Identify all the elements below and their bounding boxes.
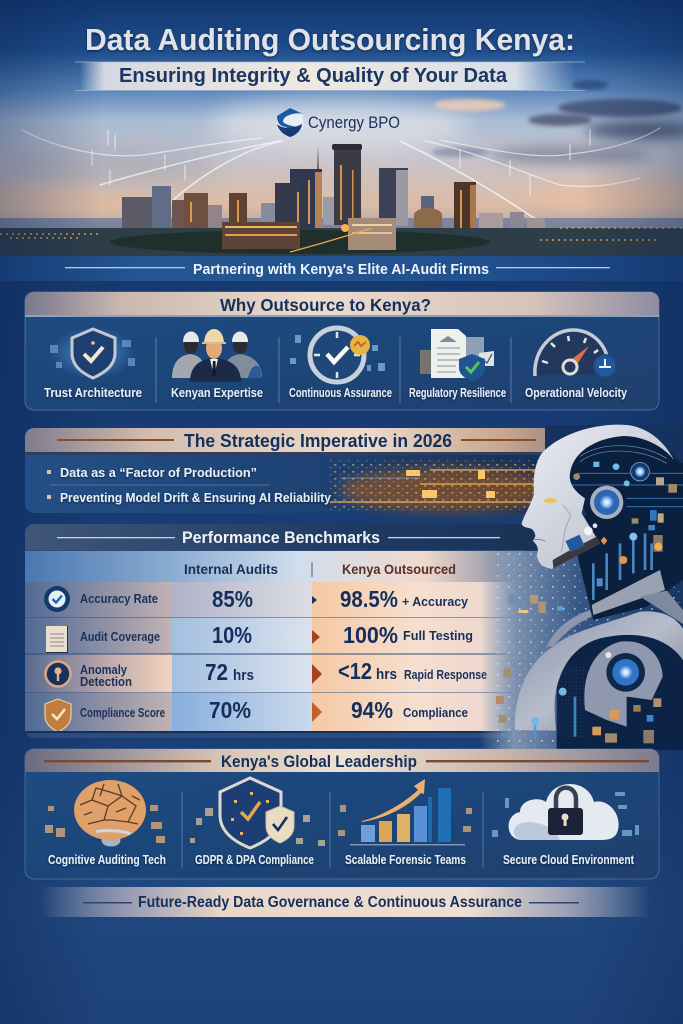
footer banner: [40, 887, 650, 917]
label: Operational Velocity: [525, 385, 628, 400]
row: compliance score: 94%: [351, 697, 393, 723]
label: Trust Architecture: [44, 385, 142, 400]
label: Cognitive Auditing Tech: [48, 852, 166, 867]
row: accuracy rate: Accuracy Rate: [80, 592, 158, 606]
label: Kenyan Expertise: [171, 385, 263, 400]
icon: check badge: [44, 586, 70, 612]
label: Regulatory Resilience: [409, 385, 506, 400]
table column headers: Internal Audits: [184, 561, 278, 577]
bullet: model drift: Preventing Model Drift & Ensuring AI Reliability: [60, 490, 332, 505]
data lines over the skyline: [22, 128, 660, 222]
data glow graphic: [330, 460, 560, 512]
panel: AI robot and data field: [480, 425, 683, 750]
icon: compliance shield: [45, 699, 71, 732]
row: compliance score: Compliance: [403, 705, 468, 720]
icon: cognitive brain: [45, 780, 165, 846]
row: audit coverage: Full Testing: [403, 628, 473, 643]
heading: The Strategic Imperative in 2026: [184, 431, 452, 451]
heading: Kenya's Global Leadership: [221, 753, 417, 771]
title: Data Auditing Outsourcing Kenya:: [85, 22, 575, 57]
row: anomaly detection: <12: [338, 658, 372, 684]
row: anomaly detection: Anomaly: [80, 663, 127, 677]
row: accuracy rate: [25, 582, 520, 617]
icon: document: [46, 626, 68, 653]
row: audit coverage: 10%: [212, 622, 252, 648]
row: audit coverage: 100%: [343, 622, 398, 648]
row: anomaly detection: Detection: [80, 675, 132, 689]
tagline text: Partnering with Kenya's Elite AI-Audit Firms: [193, 261, 489, 278]
tagline band: [0, 256, 683, 281]
bullet: factor of production: Data as a “Factor of Production”: [60, 465, 257, 480]
panel: performance benchmarks: [25, 524, 560, 738]
row: audit coverage: [25, 618, 520, 654]
row: compliance score: 70%: [209, 697, 251, 723]
label: GDPR & DPA Compliance: [195, 852, 314, 867]
icon: secure cloud: [492, 784, 639, 840]
row: anomaly detection: [25, 654, 520, 692]
row: compliance score: [25, 693, 520, 732]
label: Continuous Assurance: [289, 385, 392, 400]
label: Scalable Forensic Teams: [345, 852, 466, 867]
panel: why outsource to Kenya: [25, 292, 659, 410]
icon: continuous assurance clock: [290, 328, 385, 382]
subtitle banner: [75, 62, 585, 91]
icon: Kenyan experts: [172, 329, 262, 382]
clouds: [0, 80, 683, 219]
row: anomaly detection: hrs: [376, 666, 397, 683]
row: anomaly detection: Rapid Response: [404, 667, 487, 682]
table column headers: [25, 551, 525, 582]
row: compliance score: Compliance Score: [80, 706, 165, 720]
icon: scalable chart: [338, 779, 472, 845]
panel: strategic imperative 2026: [25, 428, 640, 513]
icon: trust shield: [50, 327, 135, 379]
row: accuracy rate: + Accuracy: [402, 594, 469, 609]
logo: Cynergy BPO: [277, 108, 400, 137]
icon: regulatory documents: [420, 329, 494, 381]
heading: Why Outsource to Kenya?: [220, 295, 431, 315]
robot figure: [496, 425, 683, 750]
heading: Performance Benchmarks: [182, 529, 380, 547]
label: Secure Cloud Environment: [503, 852, 635, 867]
panel: Kenya's global leadership: [25, 749, 659, 879]
row: accuracy rate: 85%: [212, 586, 253, 612]
skyline: [0, 144, 683, 256]
footer text: Future-Ready Data Governance & Continuous Assurance: [138, 894, 522, 911]
subtitle text: Ensuring Integrity & Quality of Your Data: [119, 65, 508, 87]
icon: anomaly magnifier: [46, 662, 70, 686]
logo wordmark: Cynergy BPO: [308, 113, 400, 132]
row: audit coverage: Audit Coverage: [80, 630, 160, 644]
icon: velocity gauge: [535, 330, 616, 377]
icon: GDPR shield: [190, 778, 325, 848]
hero: skyline photo: [0, 0, 683, 256]
glowing windows: [190, 165, 462, 228]
row: anomaly detection: 72: [205, 659, 228, 685]
row: anomaly detection: hrs: [233, 667, 254, 684]
row: accuracy rate: 98.5%: [340, 586, 398, 612]
table column headers: Kenya Outsourced: [342, 561, 456, 577]
